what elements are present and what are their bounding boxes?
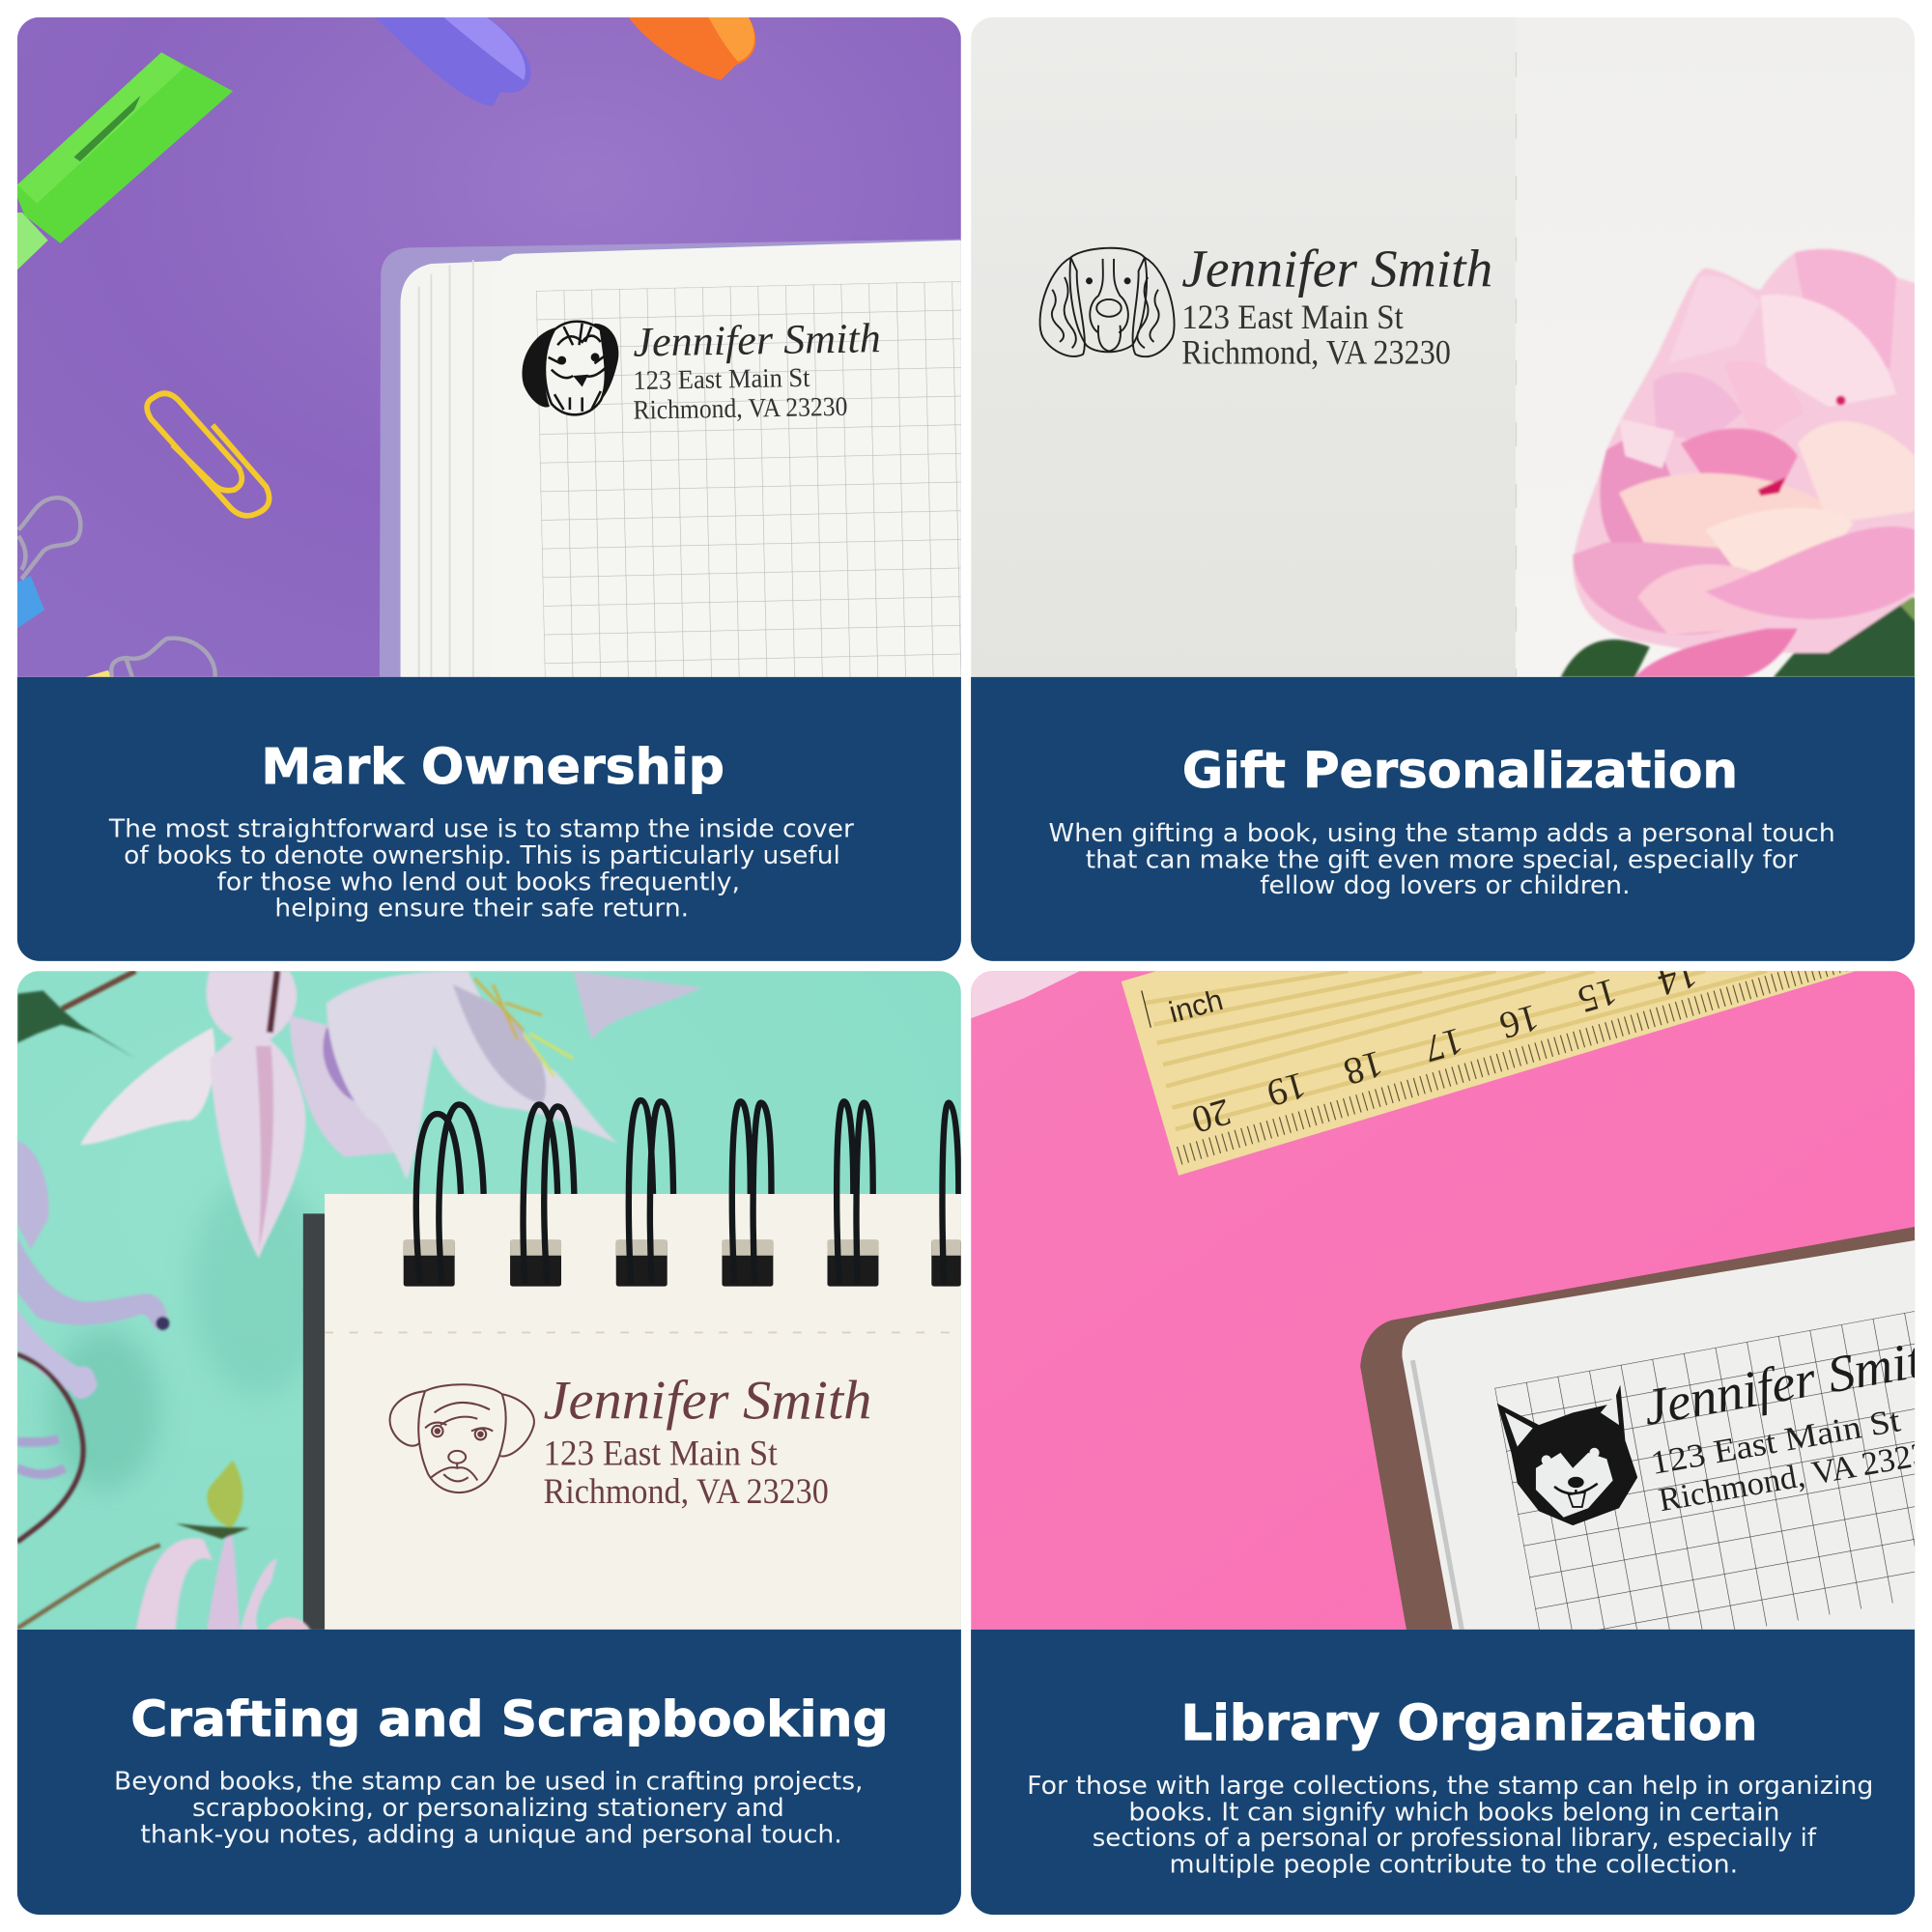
flower: left side: [17, 1142, 169, 1542]
icon: green highlighter: [17, 52, 233, 270]
body text: [114, 1767, 863, 1849]
heading: Library Organization: [1181, 1695, 1758, 1752]
ruler numbers: 20: [1187, 1091, 1236, 1142]
heading: Crafting and Scrapbooking: [130, 1691, 889, 1748]
stamped city line: Richmond, VA 23230: [543, 1471, 829, 1511]
body text: helping ensure their safe return.: [274, 895, 689, 923]
body text: sections of a personal or professional library, especially if: [1093, 1824, 1817, 1853]
heading: Mark Ownership: [261, 739, 724, 796]
body text: for those who lend out books frequently,: [216, 867, 740, 896]
stamped city line: Richmond, VA 23230: [633, 392, 848, 426]
body text: that can make the gift even more special, especially for: [1086, 845, 1798, 874]
photo: pink desk with ruler and notebook: [971, 952, 1932, 1666]
stamped street address: 123 East Main St: [1648, 1402, 1903, 1482]
ruler inch label: inch: [1166, 983, 1227, 1029]
heading: Gift Personalization: [1182, 743, 1738, 800]
photo: spiral notepad with flowers: [17, 971, 965, 1633]
icon: pug dog face: [390, 1384, 534, 1492]
stamp impression: [390, 1371, 871, 1511]
stamped name: Jennifer Smith: [633, 315, 881, 366]
iridescent object: [971, 971, 1080, 1018]
ruler numbers: 14: [1653, 952, 1702, 1005]
body text: scrapbooking, or personalizing stationery and: [192, 1794, 784, 1823]
photo: card with peony: [971, 17, 1916, 678]
body text: The most straightforward use is to stamp the inside cover: [108, 814, 854, 843]
ruler numbers: 18: [1339, 1042, 1387, 1094]
notebook grid: [1494, 1303, 1932, 1666]
stamped name: Jennifer Smith: [543, 1371, 871, 1432]
stamp impression: [522, 315, 881, 426]
panel: mark ownership: [17, 17, 988, 961]
body text: When gifting a book, using the stamp adds a personal touch: [1048, 819, 1835, 848]
peony green leaves: [1560, 639, 1650, 678]
flower: upper cluster: [17, 971, 702, 1259]
ruler numbers: 16: [1495, 996, 1544, 1047]
icon: spaniel dog face: [1040, 248, 1175, 356]
caption band: [17, 677, 961, 961]
body text: fellow dog lovers or children.: [1260, 871, 1630, 900]
spiral binding holes: [404, 1240, 961, 1287]
stamp impression: [1040, 240, 1492, 371]
ruler numbers: 17: [1419, 1019, 1467, 1070]
caption band: [971, 677, 1915, 961]
body text: [1048, 819, 1835, 900]
icon: shaggy dog face: [522, 322, 618, 414]
panel: gift personalization: [971, 17, 1916, 961]
photo: purple desk with notebook: [17, 17, 988, 685]
panel: crafting and scrapbooking: [17, 971, 965, 1915]
ruler numbers: 19: [1263, 1064, 1311, 1115]
icon: husky dog face: [1497, 1385, 1637, 1525]
stamp impression: [1497, 1325, 1932, 1525]
panel: library organization: [971, 952, 1932, 1915]
body text: Beyond books, the stamp can be used in crafting projects,: [114, 1767, 863, 1796]
icon: binder clips: [17, 497, 215, 678]
notebook: [1360, 1227, 1932, 1666]
wooden ruler: [1122, 952, 1857, 1176]
stamped name: Jennifer Smith: [1181, 240, 1492, 298]
stamped street address: 123 East Main St: [633, 363, 810, 396]
flower: bottom buds: [17, 1460, 311, 1632]
body text: [1027, 1772, 1873, 1880]
stamped street address: 123 East Main St: [1181, 298, 1404, 336]
body text: of books to denote ownership. This is particularly useful: [124, 841, 840, 870]
stamped street address: 123 East Main St: [543, 1434, 779, 1473]
body text: [108, 814, 854, 923]
body text: For those with large collections, the stamp can help in organizing: [1027, 1772, 1873, 1801]
ruler numbers: [1187, 952, 1702, 1142]
caption band: [17, 1630, 961, 1915]
body text: thank-you notes, adding a unique and personal touch.: [140, 1820, 842, 1849]
icon: yellow paper clip: [147, 393, 270, 516]
notebook grid: [536, 281, 988, 685]
peony flower: [1560, 249, 1916, 678]
icon: orange pen clip: [629, 17, 755, 80]
notepad: [303, 1100, 965, 1633]
caption band: [971, 1630, 1915, 1915]
icon: purple pen clip: [376, 17, 531, 106]
body text: multiple people contribute to the collection.: [1169, 1851, 1738, 1880]
body text: books. It can signify which books belong in certain: [1128, 1798, 1779, 1827]
stamped city line: Richmond, VA 23230: [1181, 332, 1451, 371]
ruler numbers: 15: [1574, 970, 1622, 1021]
spiral rings: [416, 1100, 958, 1283]
notebook: [380, 239, 988, 685]
